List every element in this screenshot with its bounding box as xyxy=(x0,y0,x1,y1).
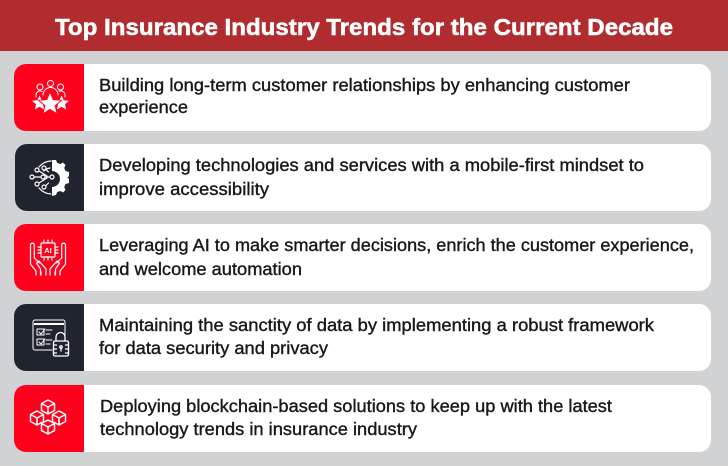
text: blockchain: technology trends in insurance industry xyxy=(100,419,417,439)
text: customer relationships: Building long-term customer relationships by enhancing customer xyxy=(99,75,630,95)
text: mobile-first technologies xyxy=(99,155,644,199)
icon: people and stars xyxy=(32,80,69,114)
text: blockchain xyxy=(100,396,612,439)
text: mobile-first technologies: improve accessibility xyxy=(99,179,269,199)
text: mobile-first technologies: Developing technologies and services with a mobile-first mindset to xyxy=(99,155,644,175)
text: AI decisions: Leveraging AI to make smarter decisions, enrich the customer experience, xyxy=(99,235,694,255)
icon: checklist and padlock xyxy=(33,320,68,356)
text: AI decisions: and welcome automation xyxy=(99,259,302,279)
text: data security: Maintaining the sanctity of data by implementing a robust framework xyxy=(99,315,654,335)
icon: hands holding AI chip: AI xyxy=(44,246,52,255)
panel: blockchain xyxy=(14,385,711,452)
panel: mobile-first technologies xyxy=(15,144,711,211)
text: AI decisions xyxy=(99,235,694,279)
header banner xyxy=(0,0,728,51)
text: blockchain: Deploying blockchain-based solutions to keep up with the latest xyxy=(100,396,612,416)
icon: hands holding AI chip xyxy=(30,240,66,275)
panel: data security xyxy=(14,304,711,371)
title: Top Insurance Industry Trends for the Current Decade xyxy=(55,14,673,40)
icon: gear with circuit xyxy=(30,160,69,196)
text: data security xyxy=(99,315,654,358)
text: customer relationships: experience xyxy=(99,97,188,117)
icon: linked blocks xyxy=(30,400,66,434)
text: data security: for data security and privacy xyxy=(99,338,328,358)
panel: AI decisions xyxy=(14,224,711,291)
panel: customer relationships xyxy=(14,64,711,131)
text: customer relationships xyxy=(99,75,630,117)
